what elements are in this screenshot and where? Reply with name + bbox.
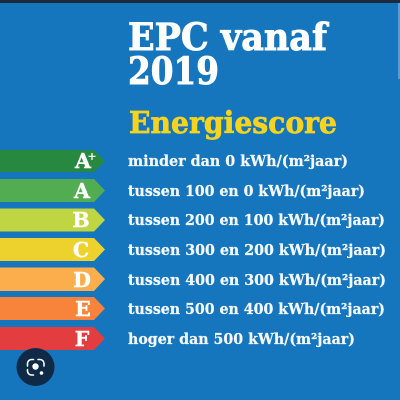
rating A row xyxy=(0,179,365,203)
rating B row xyxy=(0,208,385,232)
rating C row: C xyxy=(73,238,89,262)
rating F row: F xyxy=(75,327,90,351)
rating B row: tussen 200 en 100 kWh/(m²jaar) xyxy=(128,211,385,229)
rating A+ row xyxy=(0,149,348,173)
rating A+ row: minder dan 0 kWh/(m²jaar) xyxy=(128,152,348,170)
rating E row xyxy=(0,297,385,321)
title: EPC vanaf xyxy=(128,15,329,59)
rating D row xyxy=(0,268,386,292)
rating E row: E xyxy=(75,297,91,321)
rating D row: D xyxy=(73,268,91,292)
rating C row xyxy=(0,238,386,262)
rating F row: hoger dan 500 kWh/(m²jaar) xyxy=(128,330,355,348)
title xyxy=(128,15,329,93)
rating A row: A xyxy=(73,179,91,203)
rating C row: tussen 300 en 200 kWh/(m²jaar) xyxy=(128,241,386,259)
title: 2019 xyxy=(128,49,219,93)
rating A+ row: + xyxy=(87,150,97,163)
rating B row: B xyxy=(72,208,90,232)
rating E row: tussen 500 en 400 kWh/(m²jaar) xyxy=(128,300,385,318)
rating A+ row: A xyxy=(74,149,92,173)
rating A row: tussen 100 en 0 kWh/(m²jaar) xyxy=(128,182,365,200)
rating F row xyxy=(0,327,355,351)
rating D row: tussen 400 en 300 kWh/(m²jaar) xyxy=(128,271,386,289)
icon: lens button xyxy=(16,348,54,386)
heading: Energiescore: Energiescore xyxy=(129,106,337,141)
